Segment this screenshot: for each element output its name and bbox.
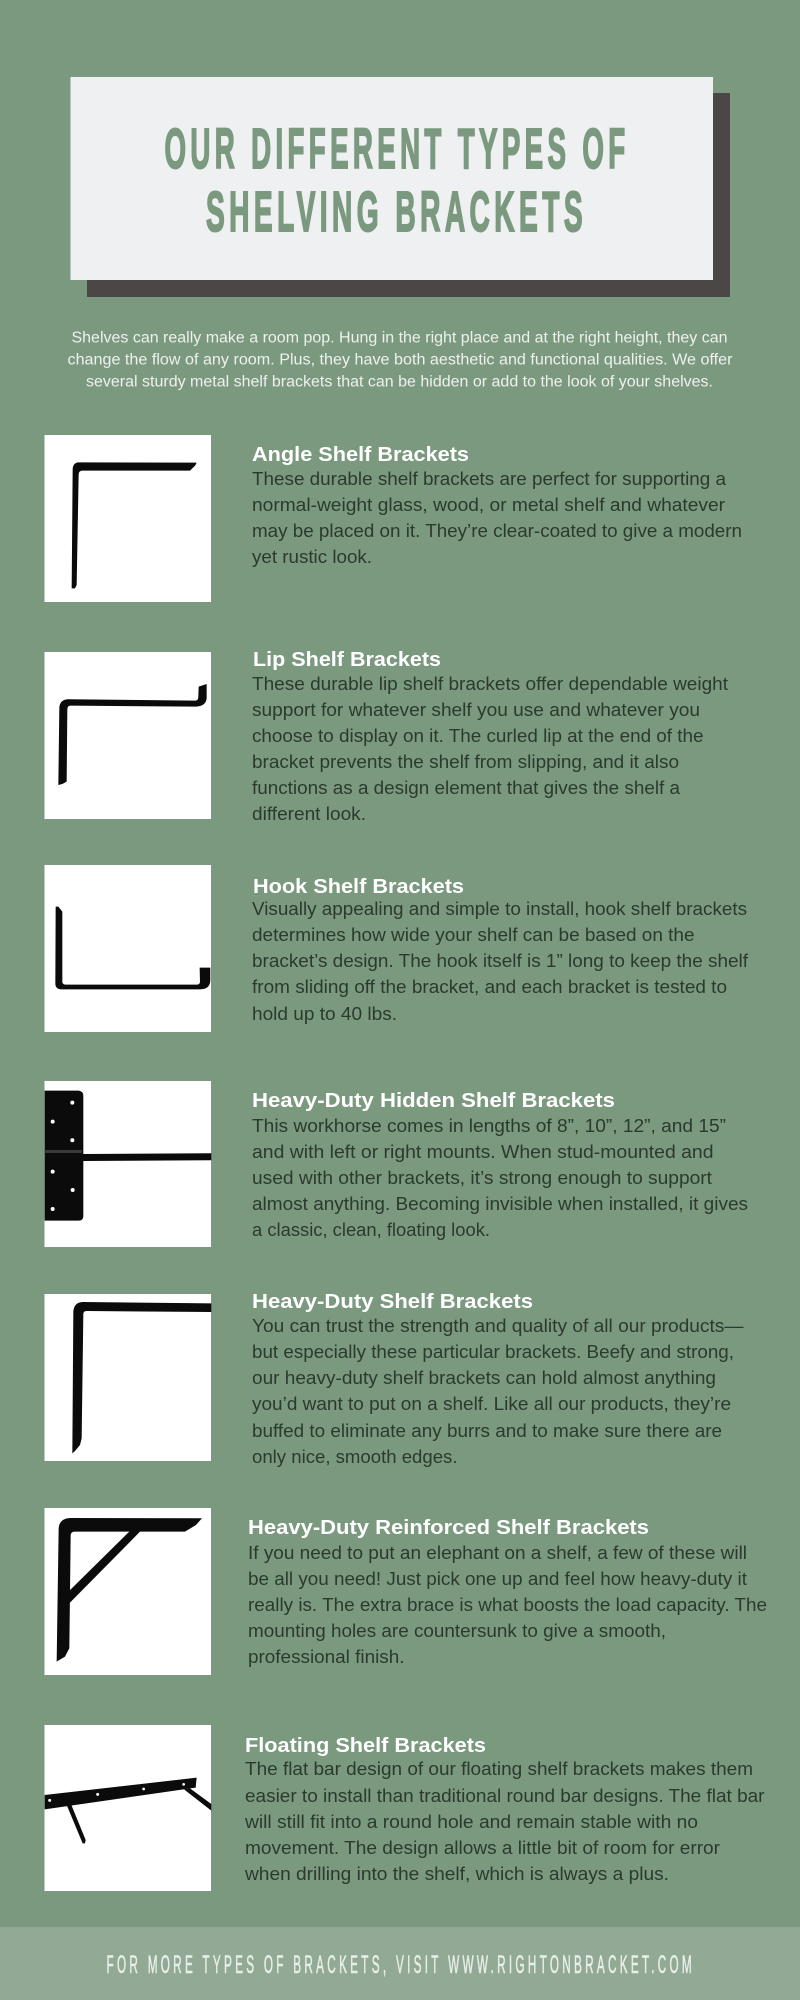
- description: may be placed on it. They’re clear-coated to give a modern: [252, 520, 742, 541]
- description: be all you need! Just pick one up and feel how heavy-duty it: [248, 1568, 747, 1589]
- description: [252, 673, 728, 824]
- panel: floating shelf brackets: [44, 1725, 764, 1891]
- description: movement. The design allows a little bit of room for error: [245, 1837, 720, 1858]
- description: [252, 1315, 744, 1467]
- image: hidden bracket: [44, 1081, 211, 1247]
- description: a classic, clean, floating look.: [252, 1219, 490, 1240]
- description: Visually appealing and simple to install, hook shelf brackets: [252, 898, 747, 919]
- image: reinforced bracket: [44, 1508, 211, 1675]
- description: our heavy-duty shelf brackets can hold almost anything: [252, 1367, 716, 1388]
- description: you’d want to put on a shelf. Like all our products, they’re: [252, 1393, 731, 1414]
- description: when drilling into the shelf, which is always a plus.: [244, 1863, 669, 1884]
- description: but especially these particular brackets. Beefy and strong,: [252, 1341, 734, 1362]
- description: hold up to 40 lbs.: [252, 1003, 397, 1024]
- heading: Hook Shelf Brackets: [253, 876, 464, 898]
- panel: heavy-duty hidden shelf brackets: [44, 1081, 748, 1247]
- image: hook bracket: [44, 865, 211, 1032]
- description: mounting holes are countersunk to give a smooth,: [248, 1620, 666, 1641]
- panel: hook shelf brackets: [44, 865, 749, 1032]
- card shadow: [87, 93, 730, 297]
- description: bracket prevents the shelf from slipping, and it also: [252, 751, 679, 772]
- description: professional finish.: [248, 1646, 404, 1667]
- description: This workhorse comes in lengths of 8”, 10”, 12”, and 15”: [252, 1115, 726, 1136]
- description: [252, 898, 749, 1024]
- intro text: Shelves can really make a room pop. Hung in the right place and at the right height, they can: [72, 330, 728, 346]
- image: floating bracket: [44, 1725, 211, 1891]
- description: almost anything. Becoming invisible when installed, it gives: [252, 1193, 748, 1214]
- image: lip bracket: [44, 652, 211, 819]
- title: [164, 117, 630, 244]
- heading: Heavy-Duty Shelf Brackets: [252, 1291, 533, 1313]
- description: and with left or right mounts. When stud-mounted and: [252, 1141, 714, 1162]
- image: angle bracket: [44, 435, 211, 602]
- card panel: [70, 77, 713, 280]
- heading: Angle Shelf Brackets: [252, 444, 469, 466]
- description: only nice, smooth edges.: [252, 1446, 458, 1467]
- heading: Heavy-Duty Hidden Shelf Brackets: [252, 1090, 615, 1112]
- description: from sliding off the bracket, and each bracket is tested to: [252, 976, 727, 997]
- panel: lip shelf brackets: [44, 649, 728, 824]
- intro text: [68, 330, 732, 390]
- description: These durable shelf brackets are perfect for supporting a: [252, 468, 727, 489]
- description: These durable lip shelf brackets offer dependable weight: [252, 673, 728, 694]
- panel: angle shelf brackets: [44, 435, 742, 602]
- description: The flat bar design of our floating shelf brackets makes them: [245, 1758, 753, 1779]
- heading: Heavy-Duty Reinforced Shelf Brackets: [248, 1517, 649, 1539]
- intro text: change the flow of any room. Plus, they have both aesthetic and functional qualities. We offer: [68, 352, 732, 368]
- description: easier to install than traditional round bar designs. The flat bar: [245, 1785, 764, 1806]
- description: will still fit into a round hole and remain stable with no: [244, 1811, 698, 1832]
- description: support for whatever shelf you use and whatever you: [252, 699, 700, 720]
- description: normal-weight glass, wood, or metal shelf and whatever: [252, 494, 725, 515]
- description: If you need to put an elephant on a shelf, a few of these will: [248, 1542, 747, 1563]
- description: determines how wide your shelf can be based on the: [252, 924, 694, 945]
- image: heavy-duty bracket: [44, 1294, 211, 1461]
- panel: heavy-duty shelf brackets: [44, 1291, 744, 1467]
- intro text: several sturdy metal shelf brackets that can be hidden or add to the look of your shelves.: [86, 374, 713, 390]
- description: used with other brackets, it’s strong enough to support: [252, 1167, 712, 1188]
- title card: [70, 77, 730, 297]
- heading: Lip Shelf Brackets: [253, 649, 441, 671]
- description: functions as a design element that gives the shelf a: [252, 777, 681, 798]
- heading: Floating Shelf Brackets: [245, 1735, 486, 1757]
- panel: heavy-duty reinforced shelf brackets: [44, 1508, 767, 1675]
- description: [244, 1758, 765, 1884]
- description: choose to display on it. The curled lip at the end of the: [252, 725, 704, 746]
- description: really is. The extra brace is what boosts the load capacity. The: [248, 1594, 767, 1615]
- description: different look.: [252, 803, 366, 824]
- description: bracket’s design. The hook itself is 1” long to keep the shelf: [252, 950, 749, 971]
- description: yet rustic look.: [252, 546, 372, 567]
- description: buffed to eliminate any burrs and to make sure there are: [252, 1420, 722, 1441]
- description: [252, 468, 742, 567]
- description: [252, 1115, 748, 1240]
- description: You can trust the strength and quality of all our products—: [252, 1315, 744, 1336]
- footer band: [0, 1927, 800, 2000]
- description: [248, 1542, 767, 1667]
